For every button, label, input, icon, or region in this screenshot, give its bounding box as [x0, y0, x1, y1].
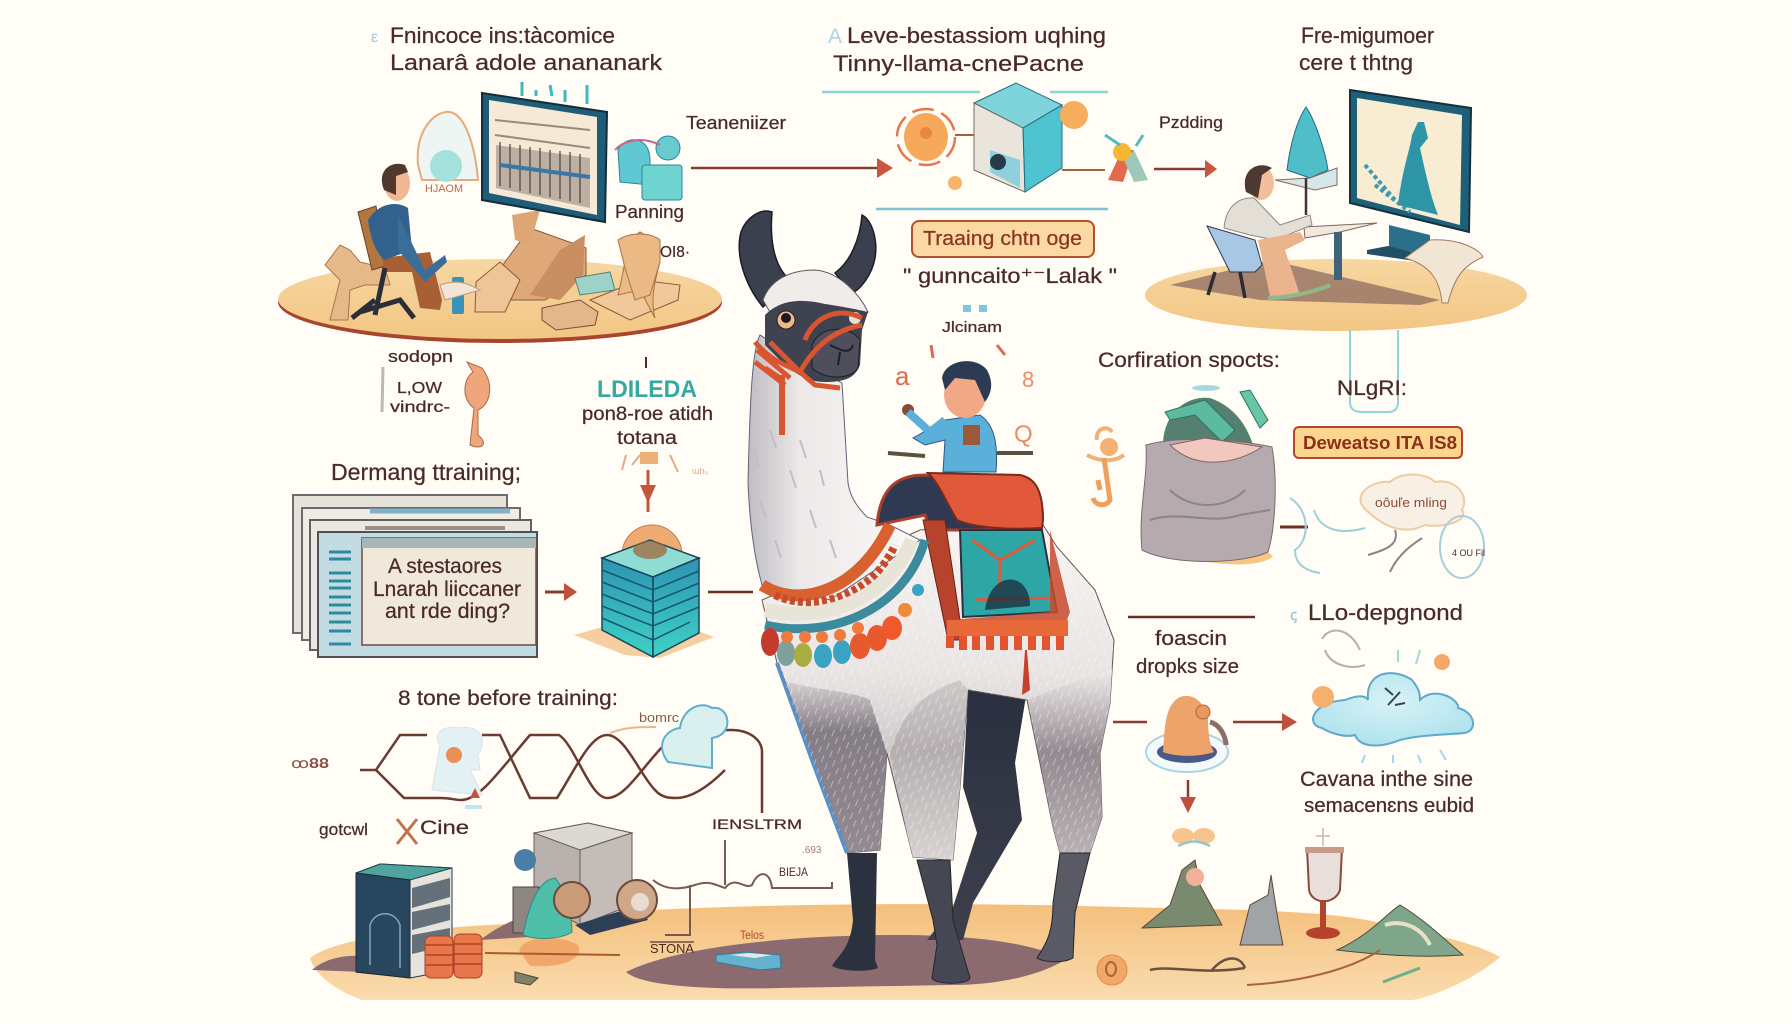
heading: top right [1299, 23, 1434, 75]
collar beads [761, 584, 924, 668]
teal heading: LDILEDA [582, 357, 713, 449]
teal rule lines [822, 92, 1108, 209]
ring with label [1440, 516, 1485, 578]
signal squiggle [653, 840, 832, 935]
heading: LLo-depgnond: ꞔ [1290, 607, 1297, 624]
badge: Deweatso: Deweatso ITA IS8 [1303, 433, 1457, 453]
small sketch and down arrow [622, 452, 709, 512]
label: iensltrm: IENSLTRM [712, 816, 802, 832]
orange creature in pool [1146, 696, 1228, 772]
blue box [716, 952, 781, 970]
X Cine label [397, 818, 469, 844]
blue cloud with face [1312, 630, 1473, 763]
colored ornament [1105, 135, 1148, 182]
boy on saddle [888, 361, 1033, 472]
teal lamp [1287, 107, 1328, 178]
ring with label: 4 OU Fil [1452, 548, 1485, 558]
rear dark leg [927, 690, 1027, 940]
window text [373, 555, 521, 623]
window text: A stestaores [388, 555, 502, 578]
caption: Cavana inthe sine [1300, 768, 1474, 817]
goblet [1305, 828, 1344, 939]
left tan animal [325, 245, 390, 320]
pale cloud with orange dot [432, 727, 482, 809]
window text: Lnarah liiccaner [373, 578, 521, 601]
dash to creature [1113, 721, 1147, 723]
llama illustration [739, 211, 1114, 983]
label: Teaneniizer: Teaneniizer [686, 113, 786, 133]
ears [739, 211, 790, 307]
saddle frame [877, 475, 1000, 530]
tan elephant [618, 234, 660, 300]
table shadow [1170, 260, 1440, 305]
person at desk [352, 164, 480, 318]
arrow: creature to cloud [1233, 713, 1297, 731]
sketch label: sodopn low vindrc: sodopn [388, 347, 453, 366]
sketch label: sodopn low vindrc: vindrc- [390, 399, 450, 416]
stacked windows [293, 495, 537, 657]
strap tail [1022, 650, 1030, 695]
top-right disc scene [1145, 90, 1527, 331]
monitor [482, 93, 607, 222]
saddle flap [928, 473, 1043, 529]
dash: cube to llama [708, 591, 753, 593]
teal heading: LDILEDA: pon8-roe atidh [582, 404, 713, 425]
pale figure: HJAOM [425, 183, 463, 195]
thought cloud [1360, 474, 1464, 530]
neck fur hatch [755, 430, 836, 558]
floating label Jlcinam: Jlcinam [942, 319, 1002, 336]
label: NLgRI: NLgRI: [1337, 377, 1407, 400]
blue fur edge [777, 663, 847, 853]
scribble label: ꝏ𝟖𝟖 [291, 755, 329, 771]
machine box [955, 83, 1105, 192]
front left lower leg [832, 853, 878, 971]
orange coin [1097, 955, 1127, 985]
heading: top left: Fnincoce ins:tàcomice [390, 23, 615, 48]
arrow: windows to cube [545, 583, 577, 601]
saddle fringe [947, 620, 1068, 650]
floating label Jlcinam [931, 305, 1005, 358]
collar [762, 525, 925, 629]
label: Panning: Panning [615, 202, 684, 222]
label: gotcwl: gotcwl [319, 820, 368, 839]
signal squiggle: .693 [802, 845, 822, 856]
body [762, 520, 1114, 860]
heading: foascin dropks size: foascin [1155, 628, 1227, 650]
caption: Cavana inthe sine: semacenɛns eubid [1304, 795, 1474, 817]
heading: top left: Lanarâ adole anananark [390, 50, 663, 75]
heading: top right: Fre-migumoer [1301, 23, 1434, 48]
teal heading: LDILEDA: LDILEDA [597, 376, 697, 403]
orange gear [897, 109, 962, 190]
floating glyph: 8 [1022, 367, 1034, 392]
heading: Corfiration spocts: Corfiration spocts: [1098, 349, 1280, 372]
body fur hatch [762, 520, 1114, 860]
sketch label: sodopn low vindrc [382, 347, 490, 447]
top-left disc scene [278, 82, 722, 343]
teal tokenizer device [615, 136, 682, 200]
eyes [777, 311, 795, 329]
navy server [356, 864, 452, 978]
white drape [1405, 240, 1483, 303]
badge: Traaing chtn oge: Traaing chtn oge [923, 228, 1082, 250]
teal cloud with label [610, 705, 727, 768]
floating glyph: Q [1014, 421, 1033, 448]
small sketch and down arrow: ɯhᵤ [692, 466, 709, 476]
notes above monitor [522, 82, 587, 104]
saddle blanket [960, 530, 1057, 617]
waves diagram [360, 730, 762, 813]
arrow: tokenizer to machine [691, 158, 893, 178]
heading: foascin dropks size [1128, 617, 1255, 678]
teal cloud with label: bomrc [639, 710, 680, 725]
arrow: creature downward [1180, 780, 1196, 813]
label: stona: STONA [650, 941, 694, 956]
caption: Cavana inthe sine: Cavana inthe sine [1300, 768, 1473, 791]
stone bag [1141, 385, 1275, 564]
left shaded thigh [782, 680, 887, 853]
signal squiggle: BIEJA [779, 865, 808, 879]
heading: LLo-depgnond: LLo-depgnond [1308, 600, 1463, 625]
heading: top centre [828, 23, 1106, 76]
window text: ant rde ding? [385, 600, 510, 623]
heading: top centre: Leve-bestassiom uqhing [847, 23, 1106, 48]
thought cloud: oôuľe mling [1375, 495, 1447, 510]
rear right lower leg [1037, 853, 1090, 962]
face [765, 301, 868, 382]
person [1248, 166, 1274, 200]
dash and teal curves [1280, 498, 1422, 573]
coin stacks [425, 934, 482, 978]
tan desk and boxes [475, 210, 680, 330]
fur highlight on front thigh [890, 680, 968, 860]
sketch label: sodopn low vindrc: L,OW [397, 380, 443, 397]
arrow: machine to monitor [1154, 160, 1217, 178]
ground with shadows [310, 904, 1500, 1000]
heading: tone before training: 8 tone before training: [398, 687, 618, 710]
heading: top centre: Tinny-llama-cnePacne [833, 51, 1084, 76]
teal heading: LDILEDA: totana [617, 428, 677, 449]
stone machine [513, 823, 657, 938]
heading: foascin dropks size: dropks size [1136, 656, 1239, 678]
heading: top left [371, 23, 663, 75]
badge: Deweatso [1294, 427, 1462, 458]
badge: Traaing chtn oge [912, 221, 1094, 257]
X Cine label: Cine [420, 818, 469, 839]
heading: top centre: A [828, 25, 842, 48]
monitor [1350, 90, 1471, 232]
fur shading on right thigh [1028, 670, 1112, 853]
label: OI8: OI8· [660, 244, 690, 261]
teal connector lines [1350, 330, 1398, 412]
rock formations [1142, 860, 1463, 985]
label: Padding: Pzdding [1159, 113, 1223, 132]
heading: top left: ε [371, 29, 378, 46]
heading: top right: cere t thtng [1299, 50, 1413, 75]
teal server cube [574, 525, 714, 658]
teal bottle [452, 277, 464, 314]
muzzle [812, 329, 860, 377]
label: Telos: Telos [740, 928, 764, 942]
caption: gunncaito Lalak: " gunncaito⁺⁻Lalak " [903, 265, 1117, 288]
head fur [763, 270, 868, 330]
table [1304, 223, 1377, 238]
front right lower leg [917, 860, 970, 983]
red halter [755, 313, 862, 435]
neck [748, 335, 920, 600]
saddle straps [923, 520, 963, 640]
orange key [1087, 428, 1124, 505]
ground blob and sticks [485, 938, 620, 985]
floating glyphs around boy: a [895, 361, 910, 391]
heading: Dermang ttraining: Dermang ttraining; [331, 459, 521, 485]
small heart shape [1172, 828, 1215, 846]
pale figure [418, 112, 478, 195]
